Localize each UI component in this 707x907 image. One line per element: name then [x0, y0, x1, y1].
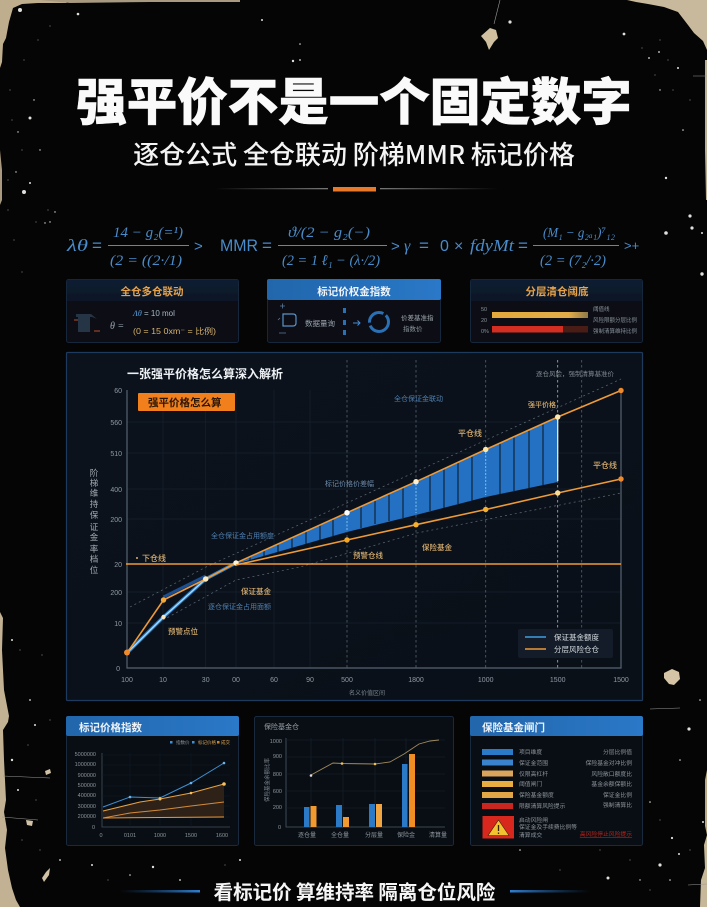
chart labels: 20	[114, 562, 122, 569]
chart legend	[518, 629, 613, 658]
bar chart: 1000	[270, 739, 282, 745]
chart tag	[138, 393, 235, 411]
panel: tiered margin: 分层清仓阈底	[526, 284, 589, 299]
gate list labels: 强制清算比	[603, 801, 632, 809]
panel: main break-even chart	[66, 352, 642, 700]
chart labels: 逐仓保证金占用面额	[208, 602, 271, 611]
panel: tiered margin: 风险限额分层比例	[593, 316, 638, 324]
horizontal liquidation line	[126, 563, 621, 565]
formula row: 14 − g₂(=¹)	[113, 225, 183, 241]
panel: tiered margin: 阈值线	[593, 305, 610, 313]
title divider	[215, 187, 498, 192]
axes	[127, 390, 621, 668]
chart labels: 强平价格	[528, 400, 556, 409]
icon: warning	[482, 816, 514, 838]
chart labels: 00	[232, 677, 240, 684]
gate list labels	[519, 748, 632, 839]
gate list labels: 高风险停止风险提示	[580, 830, 632, 838]
panel: insurance fund gate	[470, 716, 643, 846]
panel: insurance fund bar chart	[254, 716, 454, 846]
gate list labels: 基金余额保额比	[591, 780, 632, 788]
panel: cross-margin linkage: (0 = 15 0xm⁻ = 比例)	[133, 326, 216, 336]
chart labels: 全仓保证金联动	[394, 394, 443, 403]
title: 强平价不是一个固定数字	[76, 61, 632, 135]
chart labels: 保	[90, 510, 99, 520]
bar chart: 200	[273, 805, 282, 811]
gate list labels: 保证金比例	[603, 791, 632, 799]
line chart: 0101	[124, 833, 136, 839]
gate list labels: 阈值闸门	[519, 780, 542, 788]
bar chart: 逐仓量	[298, 831, 316, 839]
formula row: (M₁ − g₂ₐ₁)⁷₁₂	[543, 226, 615, 241]
formula row: λθ	[66, 236, 88, 255]
gate list labels: 项目维度	[519, 748, 542, 756]
formula row: 0	[440, 238, 449, 255]
line chart: 500000	[78, 783, 96, 789]
gate list labels: 保证金范围	[519, 759, 548, 767]
line chart: 1500	[185, 833, 197, 839]
chart legend: 保证基金额度	[554, 632, 599, 643]
blue curve	[127, 563, 236, 653]
bar chart: 800	[273, 772, 282, 778]
chart labels: 证	[90, 522, 99, 532]
formula row: =	[92, 236, 102, 255]
bar chart: 分层量	[365, 831, 383, 839]
chart legend: 分层风险仓仓	[554, 644, 599, 655]
blue margin wedge with segments	[236, 417, 558, 564]
chart labels: 逐仓风险，强制清算基准价	[536, 368, 614, 378]
chart tag: 强平价格怎么算	[148, 395, 222, 410]
chart grid	[127, 390, 621, 668]
gate list labels: 保险基金额度	[519, 791, 554, 799]
formula row: >	[391, 238, 400, 255]
chart labels: 持	[90, 499, 99, 509]
chart labels: 保证基金	[241, 586, 271, 596]
line chart: 1000000	[75, 762, 96, 768]
panel: insurance fund gate: 保险基金闸门	[482, 720, 545, 735]
chart labels: 0	[116, 666, 120, 673]
chart labels: 1500	[613, 677, 629, 684]
chart labels: 下仓线	[142, 553, 166, 563]
panel: insurance fund bar chart: 保险基金仓	[264, 722, 299, 732]
line chart: 1000	[154, 833, 166, 839]
bar chart: 0	[278, 825, 281, 831]
chart labels: 100	[121, 677, 133, 684]
formula row: =	[419, 236, 429, 255]
chart heading: 一张强平价格怎么算深入解析	[127, 365, 283, 382]
chart labels: 1800	[408, 677, 424, 684]
panel: cross-margin linkage: Λθ = 10 mol	[132, 309, 175, 318]
chart labels: 10	[114, 621, 122, 628]
formula row: >+	[624, 238, 639, 253]
lower orange line	[236, 476, 624, 565]
gate list labels: 保证金及手续费比例等	[519, 823, 577, 831]
line chart	[75, 739, 230, 839]
chart labels: 位	[90, 565, 99, 575]
chart labels: 率	[90, 544, 99, 554]
chart labels: 保险基金	[422, 542, 452, 552]
line chart: 300000	[78, 804, 96, 810]
chart labels: 梯	[90, 478, 99, 488]
formula row: >	[194, 238, 203, 255]
chart labels: 全仓保证金占用额度	[211, 531, 274, 540]
panel: mark price index: 价差基准指	[401, 312, 434, 322]
line chart: 900000	[78, 773, 96, 779]
chart labels: 1500	[550, 677, 566, 684]
line chart: 0	[92, 825, 95, 831]
panel: mark price index chart	[66, 716, 239, 846]
bar chart: 全仓量	[331, 831, 349, 839]
gate list labels: 风险敞口额度比	[591, 770, 632, 778]
chart labels: 60	[270, 677, 278, 684]
bar chart: 保险基金余额比率	[263, 757, 271, 802]
formula row	[66, 225, 639, 269]
chart labels: 500	[341, 677, 353, 684]
panel: cross-margin linkage: θ =	[110, 321, 124, 332]
gate list labels: 限额清算风险提示	[519, 802, 566, 810]
chart labels	[90, 368, 629, 697]
gate list labels: 仅限高杠杆	[519, 770, 548, 778]
gate list labels: 分层比例值	[603, 748, 632, 756]
formula row: (2 = 1 ℓ₁ − (λ·/2)	[282, 253, 380, 269]
panel: cross-margin linkage: 全仓多仓联动	[120, 284, 184, 299]
panel: tiered margin: 0%	[481, 329, 489, 335]
vertical dashed guides	[347, 360, 582, 668]
gate list labels: 启动风险闸	[519, 816, 548, 824]
subtitle: 逐仓公式 全仓联动 阶梯MMR 标记价格	[133, 135, 575, 172]
line chart: 标记价格	[198, 739, 216, 746]
line chart: 指数价	[176, 739, 190, 746]
formula row: ϑ/(2 − g₂(−)	[288, 225, 370, 241]
chart labels: 1000	[478, 677, 494, 684]
bar chart: 900	[273, 754, 282, 760]
panel: mark price index: 标记价权金指数	[317, 284, 391, 299]
panel: tiered margin: 50	[481, 307, 487, 313]
gate list bars	[482, 749, 513, 809]
line chart: 400000	[78, 793, 96, 799]
chart labels: 90	[306, 677, 314, 684]
chart labels: 560	[110, 420, 122, 427]
panel: tiered margin: 20	[481, 318, 487, 324]
formula row: =	[518, 236, 528, 255]
bottom tagline: 看标记价 算维持率 隔离仓位风险	[214, 876, 496, 905]
chart labels: 平仓线	[458, 428, 482, 438]
chart labels: 10	[159, 677, 167, 684]
line chart: 200000	[78, 814, 96, 820]
chart labels: 金	[90, 532, 99, 542]
bar chart	[263, 738, 447, 839]
formula row: MMR	[220, 236, 258, 255]
chart labels: 档	[90, 554, 98, 564]
chart labels: 预警点位	[168, 626, 198, 636]
chart labels: 510	[110, 451, 122, 458]
chart labels: 200	[110, 590, 122, 597]
bar chart: 600	[273, 789, 282, 795]
gate list labels: 清算成交	[519, 831, 542, 839]
formula row: =	[262, 236, 272, 255]
panel: cross-margin linkage	[66, 280, 238, 342]
formula row: (2 = (7₂/·2)	[540, 253, 606, 269]
bar chart: 保险金	[397, 831, 415, 839]
formula row: (2 = ((2·/1)	[110, 253, 182, 269]
chart labels: 维	[90, 488, 99, 498]
chart labels: 预警仓线	[353, 550, 383, 560]
line chart: 5000000	[75, 752, 96, 758]
chart labels: 标记价格价差幅	[325, 479, 374, 489]
panel: tiered margin	[470, 280, 642, 342]
formula row: γ	[404, 238, 411, 255]
chart labels: 阶	[90, 468, 99, 478]
chart labels: 名义价值区间	[349, 688, 385, 697]
chart labels: 400	[110, 487, 122, 494]
diagonal dashed bands	[130, 379, 621, 620]
panel: mark price index: 指数价	[403, 323, 423, 333]
panel: mark price index	[267, 279, 441, 342]
line chart: 1600	[216, 833, 228, 839]
chart labels: 30	[202, 677, 210, 684]
formula row: ×	[454, 238, 463, 255]
gate list labels: 保险基金对冲比例	[586, 759, 632, 767]
chart labels: 200	[110, 517, 122, 524]
upper orange line	[124, 388, 624, 656]
panel: mark price index chart: 标记价格指数	[79, 720, 142, 735]
line chart: 成交	[221, 739, 230, 746]
panel: mark price index: 数据量询	[305, 318, 335, 329]
chart labels: 平仓线	[593, 460, 617, 470]
formula row: fdyMt	[470, 236, 515, 255]
bar chart: 清算量	[429, 831, 447, 839]
line chart: 0	[99, 833, 103, 839]
chart labels: 60	[114, 388, 122, 395]
panel: tiered margin: 强制清算维持比例	[593, 327, 638, 335]
